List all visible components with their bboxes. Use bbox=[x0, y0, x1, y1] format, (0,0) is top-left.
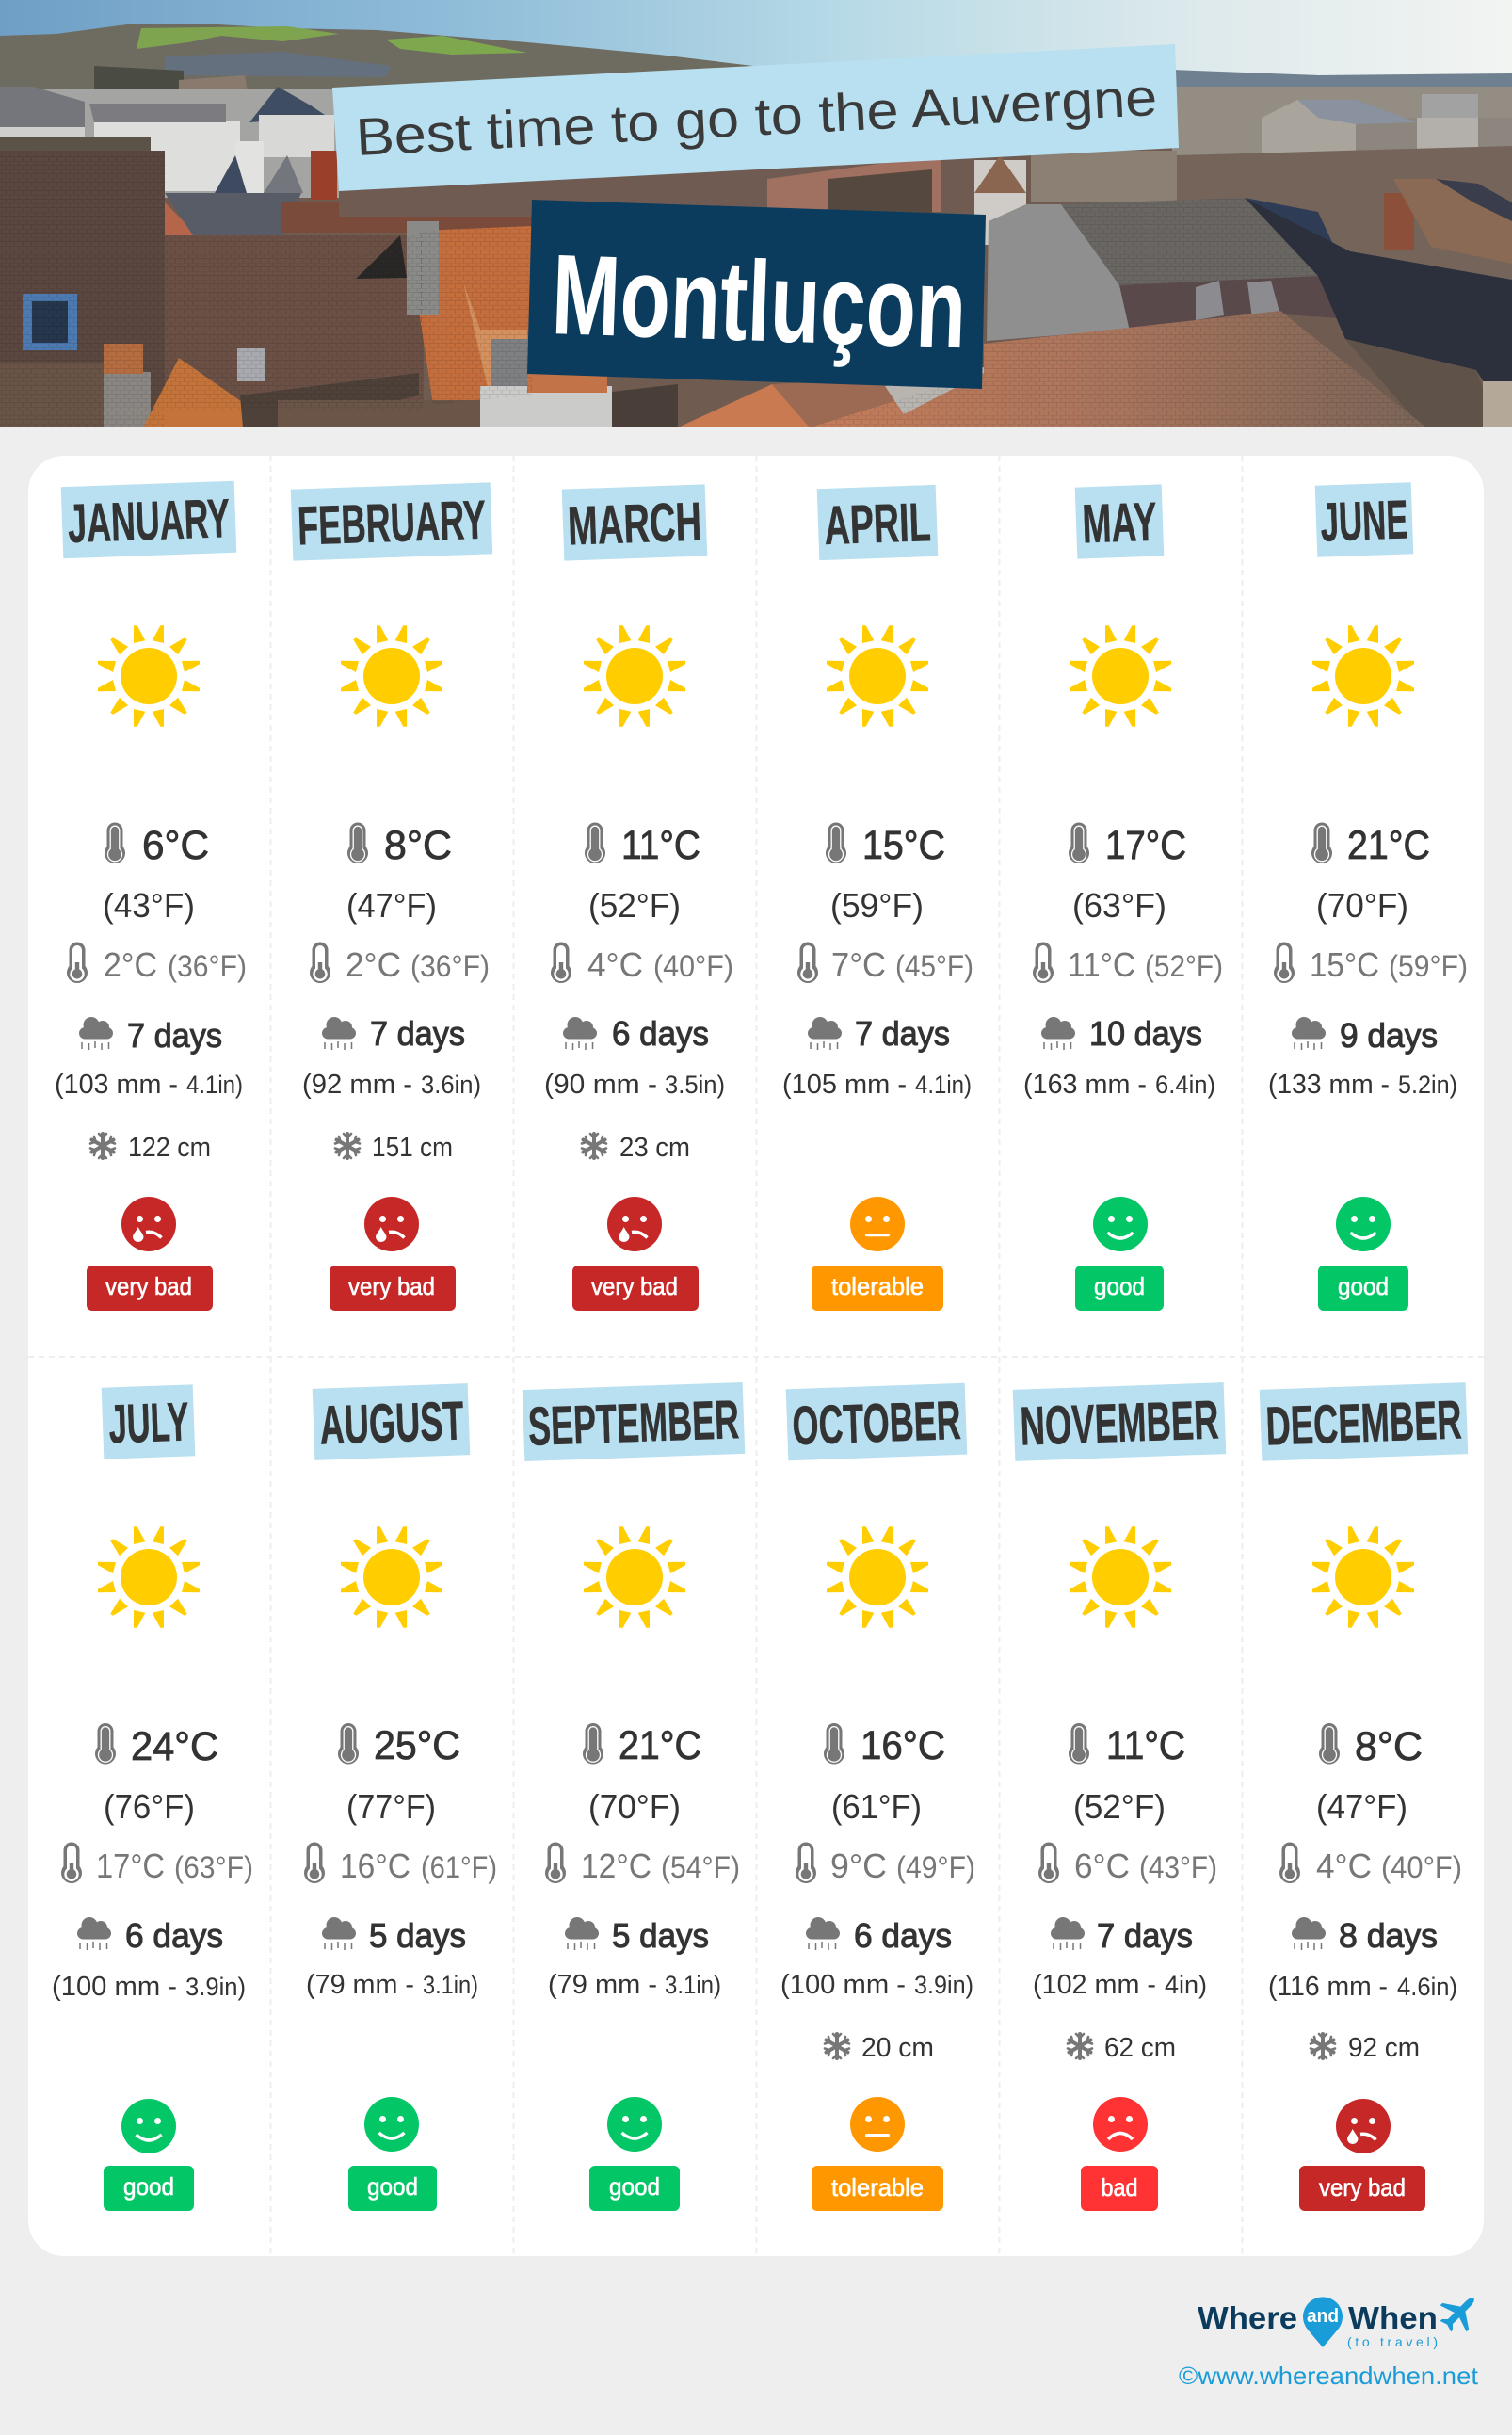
rain days: 6 days bbox=[125, 1916, 223, 1955]
icon: sun bbox=[1312, 1526, 1414, 1628]
icon: sun bbox=[341, 625, 442, 727]
icon: thermometer low bbox=[1274, 942, 1295, 983]
rating badge: very bad bbox=[591, 1272, 678, 1300]
panel: June bbox=[1268, 482, 1468, 1311]
rating badge: very bad bbox=[1319, 2173, 1406, 2201]
high temperature fahrenheit: (70°F) bbox=[588, 1787, 681, 1826]
icon: very bad face bbox=[364, 1197, 419, 1251]
month heading: June: JUNE bbox=[1319, 489, 1409, 554]
icon: sun bbox=[827, 1526, 928, 1628]
high temperature: 6°C bbox=[142, 823, 209, 868]
icon: map pin bbox=[1303, 2297, 1343, 2347]
high temperature fahrenheit: (59°F) bbox=[830, 886, 924, 925]
icon: snowflake bbox=[335, 1134, 360, 1158]
rainfall inches: 3.1in) bbox=[665, 1971, 721, 1999]
high temperature fahrenheit: (77°F) bbox=[346, 1787, 436, 1826]
panel: months card bbox=[28, 456, 1484, 2256]
high temperature fahrenheit: (47°F) bbox=[1316, 1787, 1407, 1826]
rainfall mm: (100 mm - bbox=[52, 1972, 177, 2002]
month heading: October bbox=[786, 1383, 967, 1460]
high temperature fahrenheit: (43°F) bbox=[103, 886, 195, 925]
icon: rain cloud bbox=[322, 1017, 356, 1050]
panel: February bbox=[291, 482, 492, 1311]
icon: sun bbox=[584, 625, 685, 727]
month heading: November bbox=[1013, 1382, 1226, 1461]
month heading: May bbox=[1075, 484, 1164, 559]
rating badge: good bbox=[1338, 1272, 1389, 1300]
panel: January bbox=[55, 481, 247, 1311]
high temperature fahrenheit: (61°F) bbox=[831, 1787, 922, 1826]
low temperature: 15°C bbox=[1310, 945, 1379, 984]
rainfall inches: 4.6in) bbox=[1397, 1973, 1457, 2001]
month heading: February bbox=[291, 482, 492, 561]
rating badge bbox=[812, 2166, 943, 2211]
icon: rain cloud bbox=[565, 1917, 599, 1950]
rain days: 5 days bbox=[612, 1916, 709, 1955]
panel: May bbox=[1023, 484, 1223, 1311]
rating badge bbox=[330, 1266, 456, 1311]
icon: thermometer low bbox=[1033, 942, 1054, 983]
icon: tolerable face bbox=[850, 1197, 905, 1251]
icon: good face bbox=[1336, 1197, 1391, 1251]
month heading: October: OCTOBER bbox=[791, 1390, 962, 1457]
high temperature fahrenheit: (52°F) bbox=[1073, 1787, 1166, 1826]
rainfall inches: 3.5in) bbox=[665, 1071, 725, 1099]
month heading: September bbox=[523, 1382, 745, 1461]
panel: July bbox=[52, 1384, 253, 2211]
high temperature: 16°C bbox=[861, 1723, 945, 1768]
snowfall: 20 cm bbox=[861, 2033, 934, 2063]
icon: thermometer high bbox=[585, 823, 605, 863]
rainfall mm: (116 mm - bbox=[1268, 1972, 1388, 2002]
icon: thermometer high bbox=[826, 823, 846, 863]
high temperature fahrenheit: (52°F) bbox=[588, 886, 681, 925]
rain days: 7 days bbox=[1097, 1916, 1193, 1955]
icon: rain cloud bbox=[1041, 1017, 1075, 1050]
icon: thermometer low bbox=[545, 1842, 566, 1883]
panel: August bbox=[304, 1383, 497, 2211]
month heading: April bbox=[817, 485, 938, 560]
low temperature: 4°C bbox=[1316, 1846, 1372, 1885]
icon: thermometer high bbox=[583, 1723, 603, 1764]
icon: thermometer high bbox=[1311, 823, 1332, 863]
rainfall inches: 3.9in) bbox=[185, 1973, 246, 2001]
icon: thermometer high bbox=[105, 823, 125, 863]
low temperature: 2°C bbox=[346, 945, 401, 984]
snowfall: 122 cm bbox=[128, 1133, 211, 1163]
panel: November bbox=[1013, 1382, 1226, 2211]
rainfall mm: (90 mm - bbox=[544, 1070, 657, 1100]
snowfall: 23 cm bbox=[619, 1133, 690, 1163]
rainfall inches: 5.2in) bbox=[1398, 1071, 1457, 1099]
month heading: August bbox=[313, 1383, 470, 1460]
city name banner: Montluçon bbox=[550, 230, 969, 372]
icon: sun bbox=[341, 1526, 442, 1628]
rating badge: very bad bbox=[348, 1272, 435, 1300]
rain days: 7 days bbox=[127, 1016, 222, 1055]
high temperature: 25°C bbox=[374, 1723, 460, 1768]
panel: September bbox=[523, 1382, 745, 2211]
icon: sun bbox=[98, 1526, 200, 1628]
icon: thermometer low bbox=[1038, 1842, 1059, 1883]
rainfall mm: (79 mm - bbox=[548, 1970, 657, 2000]
logo: Where and When (to travel): When bbox=[1348, 2300, 1438, 2335]
icon: thermometer high bbox=[338, 1723, 359, 1764]
title banner bbox=[332, 44, 1179, 191]
high temperature: 21°C bbox=[619, 1723, 701, 1768]
icon: thermometer low bbox=[796, 1842, 816, 1883]
icon: snowflake bbox=[1311, 2034, 1335, 2058]
icon: very bad face bbox=[121, 1197, 176, 1251]
icon: thermometer low bbox=[304, 1842, 325, 1883]
icon: good face bbox=[364, 2097, 419, 2152]
rainfall inches: 3.1in) bbox=[423, 1971, 478, 1999]
icon: tolerable face bbox=[850, 2097, 905, 2152]
high temperature: 11°C bbox=[621, 823, 700, 868]
icon: rain cloud bbox=[563, 1017, 597, 1050]
icon: rain cloud bbox=[77, 1917, 111, 1950]
low temperature fahrenheit: (36°F) bbox=[410, 949, 490, 983]
month heading: April: APRIL bbox=[823, 492, 932, 556]
panel: April bbox=[782, 485, 973, 1311]
low temperature: 2°C bbox=[104, 945, 157, 984]
icon: very bad face bbox=[1336, 2099, 1391, 2153]
rating badge bbox=[1081, 2166, 1158, 2211]
low temperature fahrenheit: (40°F) bbox=[653, 949, 733, 983]
rainfall inches: 4.1in) bbox=[915, 1071, 972, 1099]
rainfall inches: 3.9in) bbox=[914, 1971, 973, 1999]
icon: sun bbox=[1070, 625, 1171, 727]
low temperature fahrenheit: (61°F) bbox=[421, 1850, 497, 1884]
rain days: 6 days bbox=[854, 1916, 952, 1955]
rating badge: tolerable bbox=[831, 2173, 924, 2201]
icon: snowflake bbox=[1068, 2034, 1092, 2058]
rain days: 6 days bbox=[612, 1014, 709, 1053]
high temperature: 21°C bbox=[1347, 823, 1430, 868]
snowfall: 62 cm bbox=[1104, 2033, 1176, 2063]
rating badge bbox=[348, 2166, 437, 2211]
high temperature: 17°C bbox=[1105, 823, 1186, 868]
rating badge bbox=[812, 1266, 943, 1311]
month heading: February: FEBRUARY bbox=[297, 490, 487, 556]
icon: thermometer high bbox=[1319, 1723, 1340, 1764]
rainfall mm: (79 mm - bbox=[306, 1970, 414, 2000]
rainfall mm: (100 mm - bbox=[780, 1970, 906, 2000]
rain days: 8 days bbox=[1339, 1916, 1438, 1955]
icon: thermometer high bbox=[95, 1723, 116, 1764]
high temperature fahrenheit: (70°F) bbox=[1316, 886, 1408, 925]
high temperature: 11°C bbox=[1106, 1723, 1185, 1768]
icon: bad face bbox=[1093, 2097, 1148, 2152]
icon: thermometer low bbox=[551, 942, 571, 983]
low temperature fahrenheit: (40°F) bbox=[1381, 1850, 1462, 1884]
low temperature: 7°C bbox=[831, 945, 886, 984]
month heading: January: JANUARY bbox=[67, 488, 231, 555]
low temperature fahrenheit: (63°F) bbox=[174, 1850, 253, 1884]
high temperature fahrenheit: (47°F) bbox=[346, 886, 437, 925]
rainfall mm: (92 mm - bbox=[302, 1070, 412, 1100]
icon: sun bbox=[827, 625, 928, 727]
low temperature: 16°C bbox=[340, 1846, 410, 1885]
icon: rain cloud bbox=[1051, 1917, 1085, 1950]
icon: rain cloud bbox=[79, 1017, 113, 1050]
rating badge: good bbox=[123, 2172, 174, 2201]
month heading: July bbox=[102, 1384, 195, 1459]
high temperature: 15°C bbox=[862, 823, 945, 868]
rating badge: good bbox=[1094, 1272, 1145, 1300]
icon: airplane bbox=[1432, 2285, 1487, 2340]
month heading: August: AUGUST bbox=[318, 1390, 465, 1457]
rating badge: tolerable bbox=[831, 1272, 924, 1300]
rainfall mm: (105 mm - bbox=[782, 1070, 907, 1100]
low temperature fahrenheit: (54°F) bbox=[661, 1850, 740, 1884]
panel: October bbox=[780, 1383, 975, 2211]
icon: sun bbox=[584, 1526, 685, 1628]
high temperature: 24°C bbox=[131, 1724, 218, 1769]
icon: thermometer low bbox=[797, 942, 818, 983]
high temperature: 8°C bbox=[384, 823, 452, 868]
month heading: November: NOVEMBER bbox=[1019, 1389, 1220, 1458]
low temperature: 4°C bbox=[587, 945, 643, 984]
low temperature fahrenheit: (52°F) bbox=[1145, 949, 1223, 983]
icon: good face bbox=[607, 2097, 662, 2152]
high temperature: 8°C bbox=[1355, 1724, 1423, 1769]
logo: Where and When (to travel) bbox=[1198, 2285, 1487, 2349]
website credit: ©www.whereandwhen.net bbox=[1179, 2362, 1479, 2390]
rain days: 7 days bbox=[370, 1014, 465, 1053]
icon: rain cloud bbox=[1292, 1917, 1326, 1950]
low temperature fahrenheit: (43°F) bbox=[1139, 1850, 1217, 1884]
icon: rain cloud bbox=[808, 1017, 842, 1050]
low temperature: 12°C bbox=[581, 1846, 651, 1885]
low temperature: 11°C bbox=[1068, 945, 1135, 984]
title banner: Best time to go to the Auvergne bbox=[354, 67, 1159, 167]
rainfall inches: 3.6in) bbox=[421, 1071, 481, 1099]
panel: March bbox=[544, 484, 733, 1311]
rating badge bbox=[104, 2166, 194, 2211]
low temperature fahrenheit: (36°F) bbox=[168, 949, 247, 983]
high temperature fahrenheit: (76°F) bbox=[104, 1787, 195, 1826]
panel: December bbox=[1260, 1382, 1468, 2211]
icon: thermometer high bbox=[824, 1723, 844, 1764]
month heading: March bbox=[562, 484, 707, 561]
icon: very bad face bbox=[607, 1197, 662, 1251]
low temperature: 6°C bbox=[1074, 1846, 1130, 1885]
icon: sun bbox=[1070, 1526, 1171, 1628]
rating badge: bad bbox=[1102, 2173, 1137, 2201]
month heading: July: JULY bbox=[107, 1392, 190, 1455]
rating badge: good bbox=[609, 2172, 660, 2201]
low temperature fahrenheit: (59°F) bbox=[1389, 949, 1468, 983]
icon: thermometer low bbox=[61, 1842, 82, 1883]
icon: thermometer high bbox=[1069, 1723, 1089, 1764]
icon: thermometer high bbox=[347, 823, 368, 863]
month heading: January bbox=[61, 481, 236, 558]
low temperature fahrenheit: (45°F) bbox=[895, 949, 973, 983]
rainfall mm: (102 mm - bbox=[1033, 1970, 1156, 2000]
rating badge bbox=[572, 1266, 699, 1311]
logo: Where and When (to travel): (to travel) bbox=[1347, 2334, 1438, 2349]
rating badge bbox=[1299, 2166, 1425, 2211]
hero photo: rooftops of Montluçon bbox=[0, 0, 1512, 427]
icon: thermometer high bbox=[1069, 823, 1089, 863]
logo: Where and When (to travel): and bbox=[1307, 2306, 1339, 2327]
icon: thermometer low bbox=[1279, 1842, 1300, 1883]
low temperature fahrenheit: (49°F) bbox=[896, 1850, 975, 1884]
logo: Where and When (to travel): Where bbox=[1198, 2300, 1297, 2335]
rating badge bbox=[589, 2166, 680, 2211]
rainfall inches: 4.1in) bbox=[186, 1071, 243, 1099]
month heading: March: MARCH bbox=[567, 492, 702, 556]
snowfall: 151 cm bbox=[372, 1133, 453, 1163]
snowfall: 92 cm bbox=[1348, 2033, 1420, 2063]
icon: rain cloud bbox=[322, 1917, 356, 1950]
rating badge: good bbox=[367, 2172, 418, 2201]
icon: snowflake bbox=[825, 2034, 849, 2058]
icon: sun bbox=[1312, 625, 1414, 727]
rainfall inches: 4in) bbox=[1165, 1971, 1207, 1999]
rating badge bbox=[87, 1266, 213, 1311]
rating badge: very bad bbox=[105, 1272, 192, 1300]
month heading: September: SEPTEMBER bbox=[527, 1389, 740, 1458]
rating badge bbox=[1075, 1266, 1164, 1311]
rain days: 10 days bbox=[1089, 1014, 1202, 1053]
rainfall inches: 6.4in) bbox=[1155, 1071, 1215, 1099]
rainfall mm: (133 mm - bbox=[1268, 1070, 1390, 1100]
low temperature: 17°C bbox=[96, 1846, 165, 1885]
rain days: 5 days bbox=[369, 1916, 466, 1955]
icon: rain cloud bbox=[806, 1917, 840, 1950]
month heading: May: MAY bbox=[1081, 492, 1158, 555]
low temperature: 9°C bbox=[830, 1846, 887, 1885]
rainfall mm: (103 mm - bbox=[55, 1070, 178, 1100]
high temperature fahrenheit: (63°F) bbox=[1072, 886, 1166, 925]
icon: rain cloud bbox=[1292, 1017, 1326, 1050]
city name banner bbox=[527, 200, 986, 389]
rainfall mm: (163 mm - bbox=[1023, 1070, 1147, 1100]
icon: sun bbox=[98, 625, 200, 727]
icon: snowflake bbox=[90, 1134, 115, 1158]
rain days: 9 days bbox=[1340, 1016, 1438, 1055]
month heading: June bbox=[1315, 482, 1413, 557]
icon: thermometer low bbox=[310, 942, 330, 983]
icon: thermometer low bbox=[67, 942, 88, 983]
icon: good face bbox=[121, 2099, 176, 2153]
rating badge bbox=[1318, 1266, 1408, 1311]
icon: snowflake bbox=[582, 1134, 606, 1158]
rain days: 7 days bbox=[855, 1014, 950, 1053]
icon: good face bbox=[1093, 1197, 1148, 1251]
